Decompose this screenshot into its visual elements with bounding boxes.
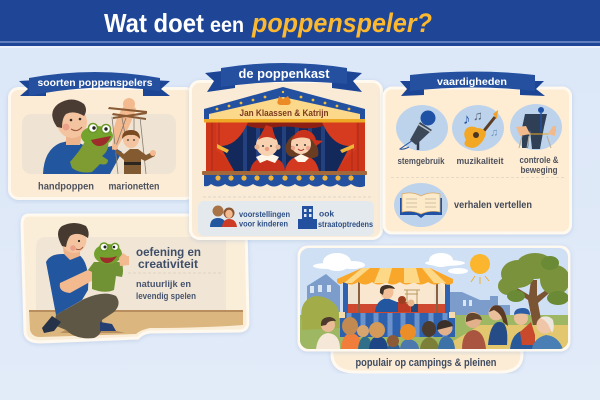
- curtains: [206, 122, 248, 171]
- inner backdrop: [22, 114, 176, 174]
- legs: [54, 294, 119, 338]
- icon: guitar: [483, 117, 495, 132]
- text: ook straatoptredens: [318, 208, 373, 229]
- panel: de poppenkast: [190, 82, 382, 238]
- illustration: man with hand puppet: [43, 98, 156, 174]
- heading: oefening en creativiteit: oefening en: [136, 245, 201, 259]
- banner: soorten poppenspelers: soorten poppenspelers: [38, 77, 153, 89]
- heading: oefening en creativiteit: [136, 245, 201, 271]
- frog puppet: [88, 262, 123, 292]
- skill: muzikaliteit: ♫: [473, 108, 483, 123]
- buildings: [307, 274, 340, 312]
- icon: children: [210, 206, 237, 227]
- floor: [29, 310, 243, 337]
- header band: [0, 0, 600, 48]
- title: [104, 8, 432, 38]
- crown: [277, 96, 291, 105]
- skill: muzikaliteit: [452, 105, 504, 166]
- puppets on stage: [398, 302, 410, 312]
- banner: de poppenkast: de poppenkast: [238, 67, 330, 81]
- stage opening: [206, 122, 365, 172]
- title: een: [210, 14, 244, 37]
- marionette: [115, 149, 155, 163]
- marionette control and strings: [108, 107, 147, 120]
- sign text: Jan Klaassen & Katrijn: [240, 108, 328, 118]
- heading: oefening en creativiteit: creativiteit: [138, 257, 198, 271]
- skill: controle en beweging: beweging: [520, 165, 558, 175]
- pediment: [204, 87, 365, 120]
- skill: stemgebruik: [396, 105, 448, 166]
- puppet Jan Klaassen: [250, 158, 285, 171]
- text: natuurlijk en levendig spelen: levendig spelen: [136, 291, 196, 302]
- audience: [316, 305, 563, 349]
- text: voorstellingen voor kinderen: voorstellingen: [239, 209, 290, 219]
- scalloped skirt: [204, 175, 365, 187]
- panel: vaardigheden: [384, 88, 570, 233]
- panel: bottom-left oefening en creativiteit: [22, 215, 248, 342]
- banner: vaardigheden: vaardigheden: [437, 76, 507, 88]
- park scene: [300, 248, 570, 349]
- label: verhalen vertellen: [454, 200, 532, 211]
- title: Wat doet: [104, 8, 204, 38]
- puppet Katrijn: [285, 156, 319, 171]
- grass: [300, 315, 568, 349]
- text: natuurlijk en levendig spelen: [136, 279, 196, 302]
- awning: [337, 268, 453, 285]
- puppeteer: [375, 298, 398, 312]
- inner backdrop: [36, 237, 226, 310]
- text: ook straatoptredens: ook: [319, 208, 334, 218]
- stage ledge: [202, 171, 367, 175]
- icon: marionette control: [522, 114, 547, 149]
- booth: [348, 282, 445, 304]
- caption: populair op campings & pleinen: [356, 357, 497, 369]
- text: natuurlijk en levendig spelen: natuurlijk en: [136, 279, 191, 290]
- banner: vaardigheden: [400, 72, 545, 96]
- text: voorstellingen voor kinderen: [239, 209, 290, 228]
- tree: [516, 280, 549, 325]
- banner: de poppenkast: [205, 63, 362, 92]
- label: controle &: [520, 155, 559, 165]
- notes: ♪: [463, 111, 470, 128]
- clouds: [313, 253, 468, 274]
- bush: [301, 296, 342, 330]
- text: ook straatoptredens: straatoptredens: [318, 219, 373, 229]
- text: voorstellingen voor kinderen: voor kinderen: [239, 218, 288, 228]
- label: muzikaliteit: [456, 156, 504, 166]
- illustration: man kneeling with puppet: [42, 223, 129, 338]
- valance: [240, 122, 330, 128]
- label: handpoppen: handpoppen: [38, 182, 94, 192]
- label: stemgebruik: [398, 156, 445, 166]
- title: poppenspeler?: [251, 8, 432, 38]
- panel: soorten poppenspelers: [10, 88, 194, 198]
- icon: buildings: [298, 206, 317, 229]
- puppet theatre: [202, 87, 367, 187]
- skill: muzikaliteit: ♫: [490, 127, 498, 139]
- stage front: [340, 313, 455, 337]
- skill: verhalen vertellen: [394, 183, 532, 227]
- sun: [470, 254, 490, 274]
- skill: controle en beweging: [510, 104, 562, 175]
- icon: microphone: [417, 140, 419, 150]
- banner: soorten poppenspelers: [19, 72, 170, 96]
- panel: populair op campings en pleinen: [298, 246, 570, 372]
- label: marionetten: marionetten: [108, 182, 160, 192]
- icon: open book: [400, 198, 442, 218]
- footer strip: [198, 201, 374, 236]
- frog puppet: [70, 142, 108, 172]
